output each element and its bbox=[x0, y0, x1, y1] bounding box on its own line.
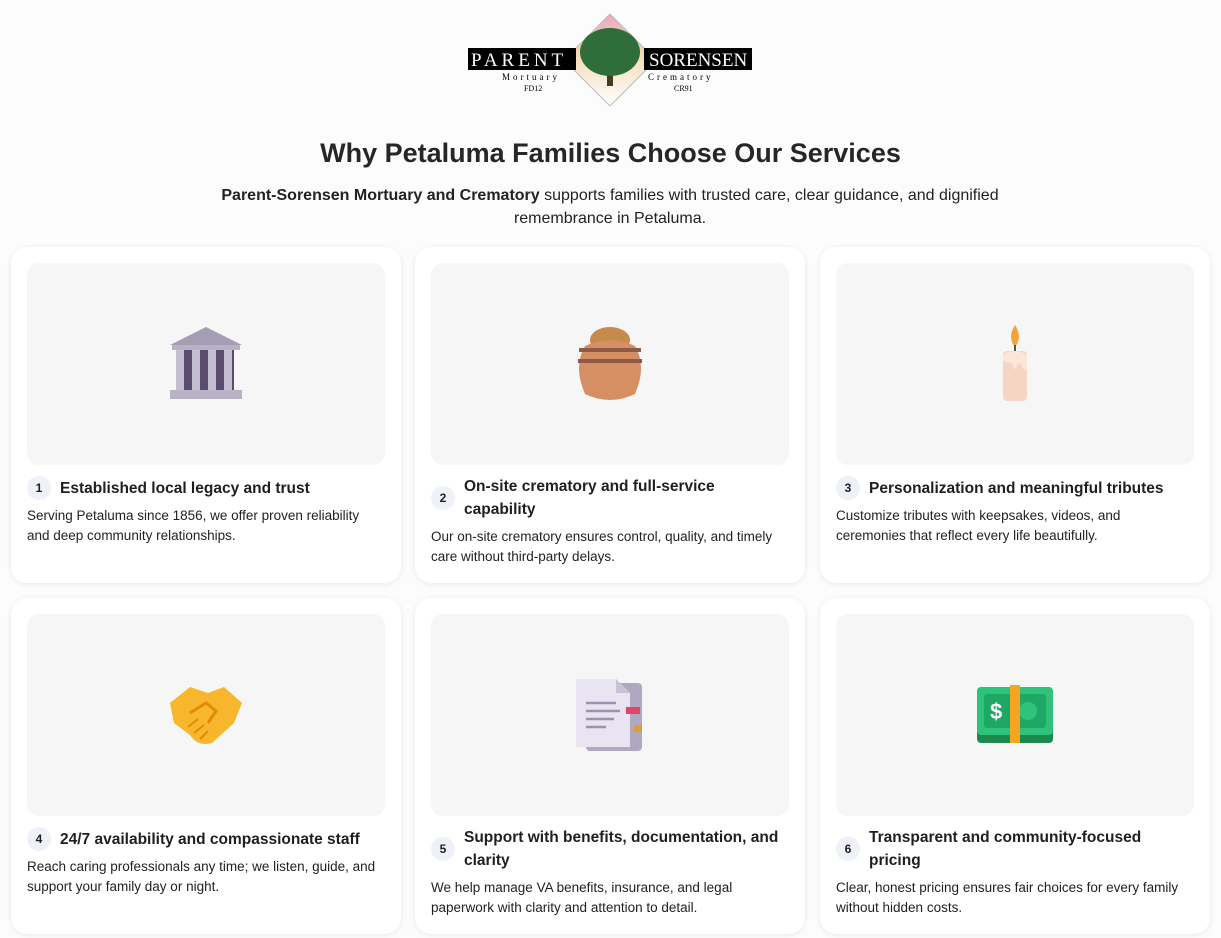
logo: SORENSEN bbox=[649, 50, 747, 71]
heading 3 bbox=[836, 476, 1164, 500]
heading 4: 4 bbox=[36, 832, 42, 846]
icon: building bbox=[27, 263, 385, 465]
heading 1: 1 bbox=[36, 481, 42, 495]
text 2: Our on-site crematory ensures control, quality, and timely care without third-party delays. bbox=[431, 529, 772, 564]
heading 2: 2 bbox=[440, 491, 446, 505]
heading 2: On-site crematory and full-service capability bbox=[464, 478, 715, 518]
heading 6: 6 bbox=[845, 842, 851, 856]
heading 4 bbox=[27, 827, 360, 851]
heading 3: 3 bbox=[845, 481, 851, 495]
icon: document bbox=[431, 614, 789, 816]
icon: handshake bbox=[27, 614, 385, 816]
card 4 bbox=[11, 598, 401, 934]
title: Why Petaluma Families Choose Our Services bbox=[320, 138, 901, 168]
text 4: Reach caring professionals any time; we listen, guide, and support your family day or night. bbox=[27, 859, 375, 894]
heading 4: 24/7 availability and compassionate staff bbox=[60, 830, 360, 848]
card 6 bbox=[820, 598, 1210, 934]
icon: money bbox=[836, 614, 1194, 816]
logo: CR91 bbox=[674, 84, 693, 93]
card 5 bbox=[415, 598, 805, 934]
text 6: Clear, honest pricing ensures fair choices for every family without hidden costs. bbox=[836, 880, 1178, 915]
heading 5: Support with benefits, documentation, and clarity bbox=[464, 829, 778, 869]
card 2 bbox=[415, 247, 805, 583]
heading 6: Transparent and community-focused pricing bbox=[869, 829, 1141, 869]
logo bbox=[468, 14, 752, 106]
card 3 bbox=[820, 247, 1210, 583]
card 1 bbox=[11, 247, 401, 583]
icon: candle bbox=[836, 263, 1194, 465]
heading 1: Established local legacy and trust bbox=[60, 480, 310, 496]
logo: PARENT bbox=[471, 50, 567, 71]
text 5: We help manage VA benefits, insurance, and legal paperwork with clarity and attention to detail. bbox=[431, 880, 732, 915]
logo: Mortuary bbox=[502, 72, 560, 82]
text 1: Serving Petaluma since 1856, we offer proven reliability and deep community relationships. bbox=[27, 508, 359, 543]
heading 3: Personalization and meaningful tributes bbox=[869, 480, 1164, 496]
heading 1 bbox=[27, 476, 310, 500]
heading 5: 5 bbox=[440, 842, 446, 856]
icon: money: $ bbox=[990, 699, 1002, 724]
logo: Crematory bbox=[648, 72, 714, 82]
logo: FD12 bbox=[524, 84, 542, 93]
icon: urn bbox=[431, 263, 789, 465]
subtitle: Parent-Sorensen Mortuary and Crematory supports families with trusted care, clear guidance, and dignified remembrance in Petaluma. bbox=[221, 187, 999, 227]
text 3: Customize tributes with keepsakes, videos, and ceremonies that reflect every life beautifully. bbox=[836, 508, 1120, 543]
